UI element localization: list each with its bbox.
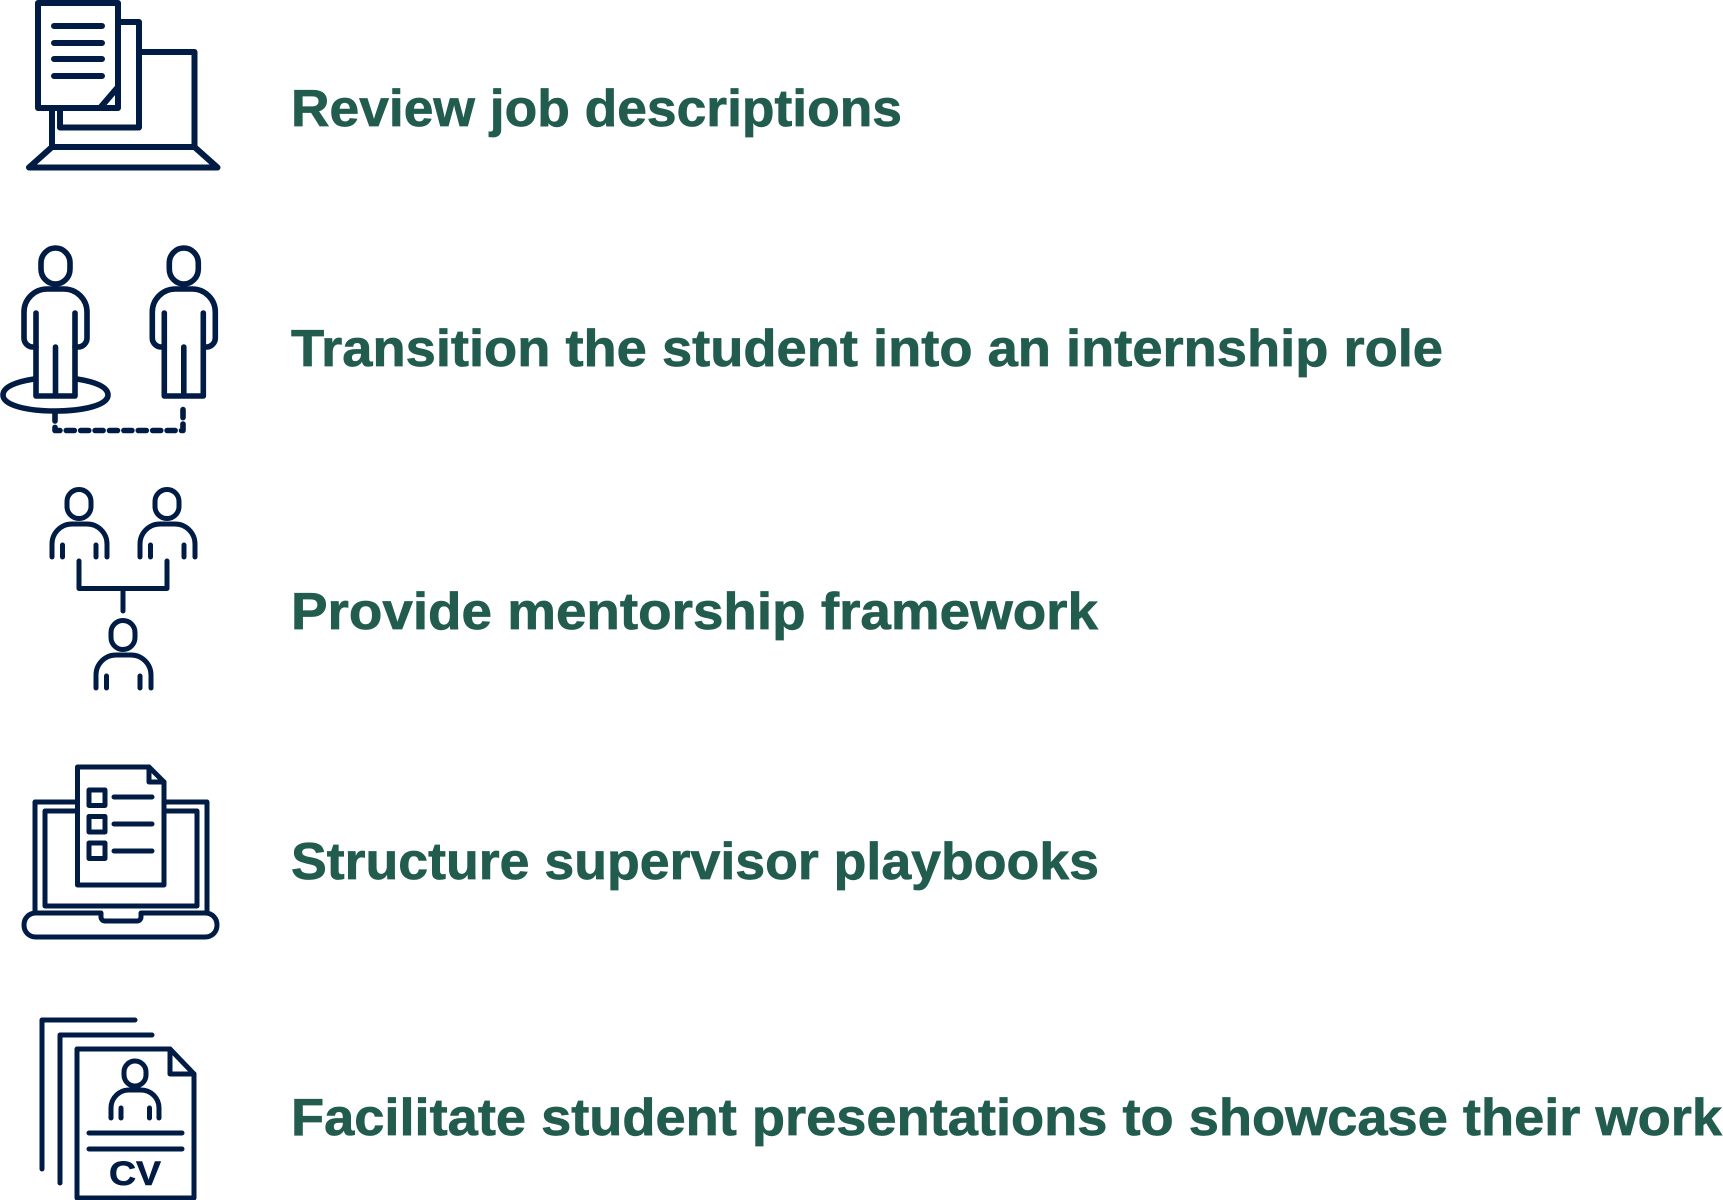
icon: checklist on laptop	[24, 767, 217, 937]
icon: documents on laptop	[29, 3, 218, 168]
icon: mentorship framework	[52, 490, 195, 688]
heading: structure supervisor playbooks: Structure supervisor playbooks	[291, 833, 1099, 891]
heading: review job descriptions: Review job descriptions	[291, 80, 902, 138]
heading: facilitate student presentations: Facilitate student presentations to showcase their work	[291, 1089, 1722, 1147]
heading: provide mentorship framework: Provide mentorship framework	[291, 583, 1098, 641]
heading: transition the student: Transition the student into an internship role	[291, 320, 1443, 378]
icon: cv documents	[42, 1020, 194, 1198]
cv label: CV	[109, 1155, 161, 1193]
icon: two people transition	[3, 248, 215, 430]
